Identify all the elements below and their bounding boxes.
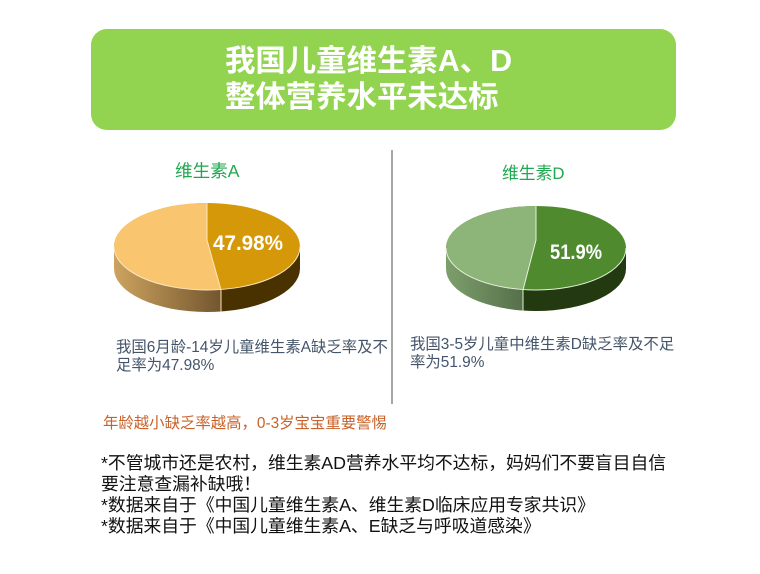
vertical divider [391,150,393,404]
caption: vitamin D: 率为51.9% [410,354,484,371]
caption: vitamin A [116,338,388,374]
title [225,44,512,114]
heading: vitamin A: 维生素A [175,161,240,181]
pie chart: vitamin A [114,203,300,312]
heading: vitamin D: 维生素D [502,164,564,183]
warning note: 年龄越小缺乏率越高，0-3岁宝宝重要警惕 [103,415,387,432]
pie label: 47.98%: 47.98% [213,232,283,255]
footnotes [101,452,666,536]
title banner [91,29,676,130]
pie charts [114,203,626,312]
title: 整体营养水平未达标 [225,80,499,114]
footnotes: *数据来自于《中国儿童维生素A、维生素D临床应用专家共识》 [101,495,595,515]
caption: vitamin A: 足率为47.98% [116,357,214,374]
caption: vitamin D: 我国3-5岁儿童中维生素D缺乏率及不足 [410,336,674,353]
title: 我国儿童维生素A、D [225,44,512,78]
caption: vitamin A: 我国6月龄-14岁儿童维生素A缺乏率及不 [116,339,388,356]
pie label: 51.9%: 51.9% [550,241,602,264]
caption: vitamin D [410,336,674,371]
footnotes: *不管城市还是农村，维生素AD营养水平均不达标，妈妈们不要盲目自信 [101,452,666,472]
pie chart: vitamin D [446,206,626,311]
footnotes: 要注意查漏补缺哦！ [101,474,261,494]
footnotes: *数据来自于《中国儿童维生素A、E缺乏与呼吸道感染》 [101,516,541,536]
